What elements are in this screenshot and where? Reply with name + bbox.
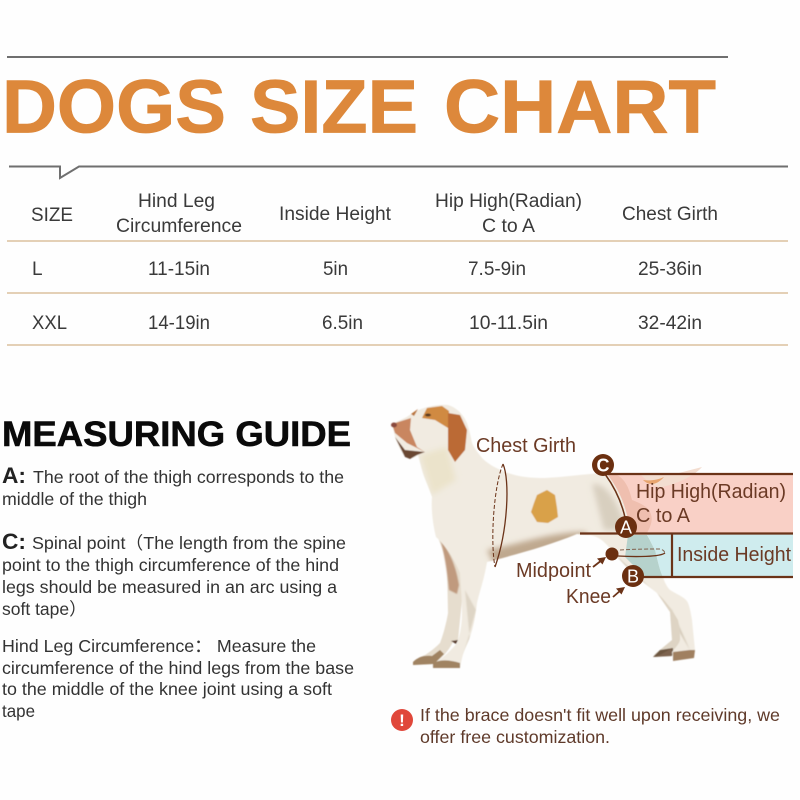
dog illustration	[391, 405, 695, 668]
table header: Inside Height	[279, 204, 392, 225]
chest girth loop	[493, 464, 507, 567]
row XXL: 32-42in	[638, 313, 702, 334]
note A: A:	[2, 463, 26, 488]
size table	[7, 191, 788, 345]
label chest girth: Chest Girth	[476, 435, 576, 457]
table header: Hip High(Radian)	[435, 191, 582, 212]
note A: The root of the thigh corresponds to the	[33, 467, 344, 487]
row XXL: XXL	[32, 313, 67, 334]
thigh tint	[625, 535, 663, 577]
label hip high: Hip High(Radian)	[636, 481, 786, 503]
marker A: A	[620, 518, 632, 538]
muzzle marking	[392, 418, 425, 452]
title: SIZE	[250, 64, 418, 148]
nose	[391, 422, 397, 428]
marker B: B	[627, 566, 639, 586]
notice	[391, 705, 780, 747]
far hind leg	[653, 590, 682, 657]
note C: Spinal point（The length from the spine	[32, 533, 346, 553]
speech-bubble rule	[9, 166, 788, 178]
table header: Hind Leg	[138, 191, 215, 212]
label knee: Knee	[566, 586, 611, 608]
ear	[448, 413, 467, 462]
note hind leg circumference	[2, 636, 354, 721]
row XXL: 6.5in	[322, 313, 363, 334]
dog measurement diagram	[391, 405, 793, 668]
tail	[640, 467, 702, 487]
note hind leg circumference: to the middle of the knee joint using a soft	[2, 679, 332, 699]
note hind leg circumference: tape	[2, 701, 35, 721]
near front paw	[433, 660, 460, 668]
note C	[2, 529, 346, 619]
note C: soft tape）	[2, 599, 87, 619]
marker B	[622, 565, 644, 587]
rump tint	[607, 474, 652, 533]
marker C: C	[596, 456, 610, 476]
note C: point to the thigh circumference of the hind	[2, 555, 339, 575]
marker A	[615, 516, 637, 538]
label midpoint: Midpoint	[516, 560, 591, 582]
row L: 7.5-9in	[468, 259, 526, 280]
title: CHART	[444, 64, 716, 148]
C to A arc	[605, 474, 627, 530]
note C: legs should be measured in an arc using a	[2, 577, 337, 597]
note A: middle of the thigh	[2, 489, 147, 509]
row XXL: 14-19in	[148, 313, 210, 334]
table header: Chest Girth	[622, 204, 718, 225]
title	[2, 64, 716, 148]
flank patch	[531, 490, 558, 523]
inside height band	[647, 534, 793, 577]
head patch	[422, 406, 449, 428]
table header	[31, 191, 718, 237]
arrow knee	[613, 587, 625, 597]
measuring guide heading: MEASURING GUIDE	[2, 415, 351, 454]
soft shading	[420, 447, 690, 660]
near body silhouette	[392, 405, 695, 668]
table header: C to A	[482, 216, 535, 237]
jowl	[395, 437, 425, 459]
hip high band	[607, 474, 793, 533]
row L: 25-36in	[638, 259, 702, 280]
far front leg	[413, 535, 466, 665]
note C: C:	[2, 529, 26, 554]
label inside height: Inside Height	[677, 544, 791, 566]
arrow midpoint	[593, 557, 606, 567]
near hind paw	[673, 650, 695, 661]
table header: SIZE	[31, 205, 73, 226]
title: DOGS	[2, 64, 226, 148]
row XXL	[32, 313, 702, 334]
notice: offer free customization.	[420, 727, 610, 747]
row L	[32, 259, 702, 280]
row L: 11-15in	[148, 259, 210, 280]
top rule	[7, 56, 728, 58]
note hind leg circumference: circumference of the hind legs from the base	[2, 658, 354, 678]
icon: warning: !	[399, 711, 405, 730]
row L: 5in	[323, 259, 348, 280]
note A	[2, 463, 344, 509]
table header: Circumference	[116, 216, 242, 237]
row L: L	[32, 259, 43, 280]
marker C	[592, 454, 614, 476]
row XXL: 10-11.5in	[469, 313, 548, 334]
notice: If the brace doesn't fit well upon receiving, we	[420, 705, 780, 725]
eye	[425, 414, 431, 416]
icon: warning	[391, 709, 413, 731]
midpoint loop	[618, 549, 665, 557]
midpoint dot	[606, 548, 618, 560]
note hind leg circumference: Hind Leg Circumference： Measure the	[2, 636, 316, 656]
band frame lines	[580, 474, 793, 577]
label C to A: C to A	[636, 505, 691, 527]
